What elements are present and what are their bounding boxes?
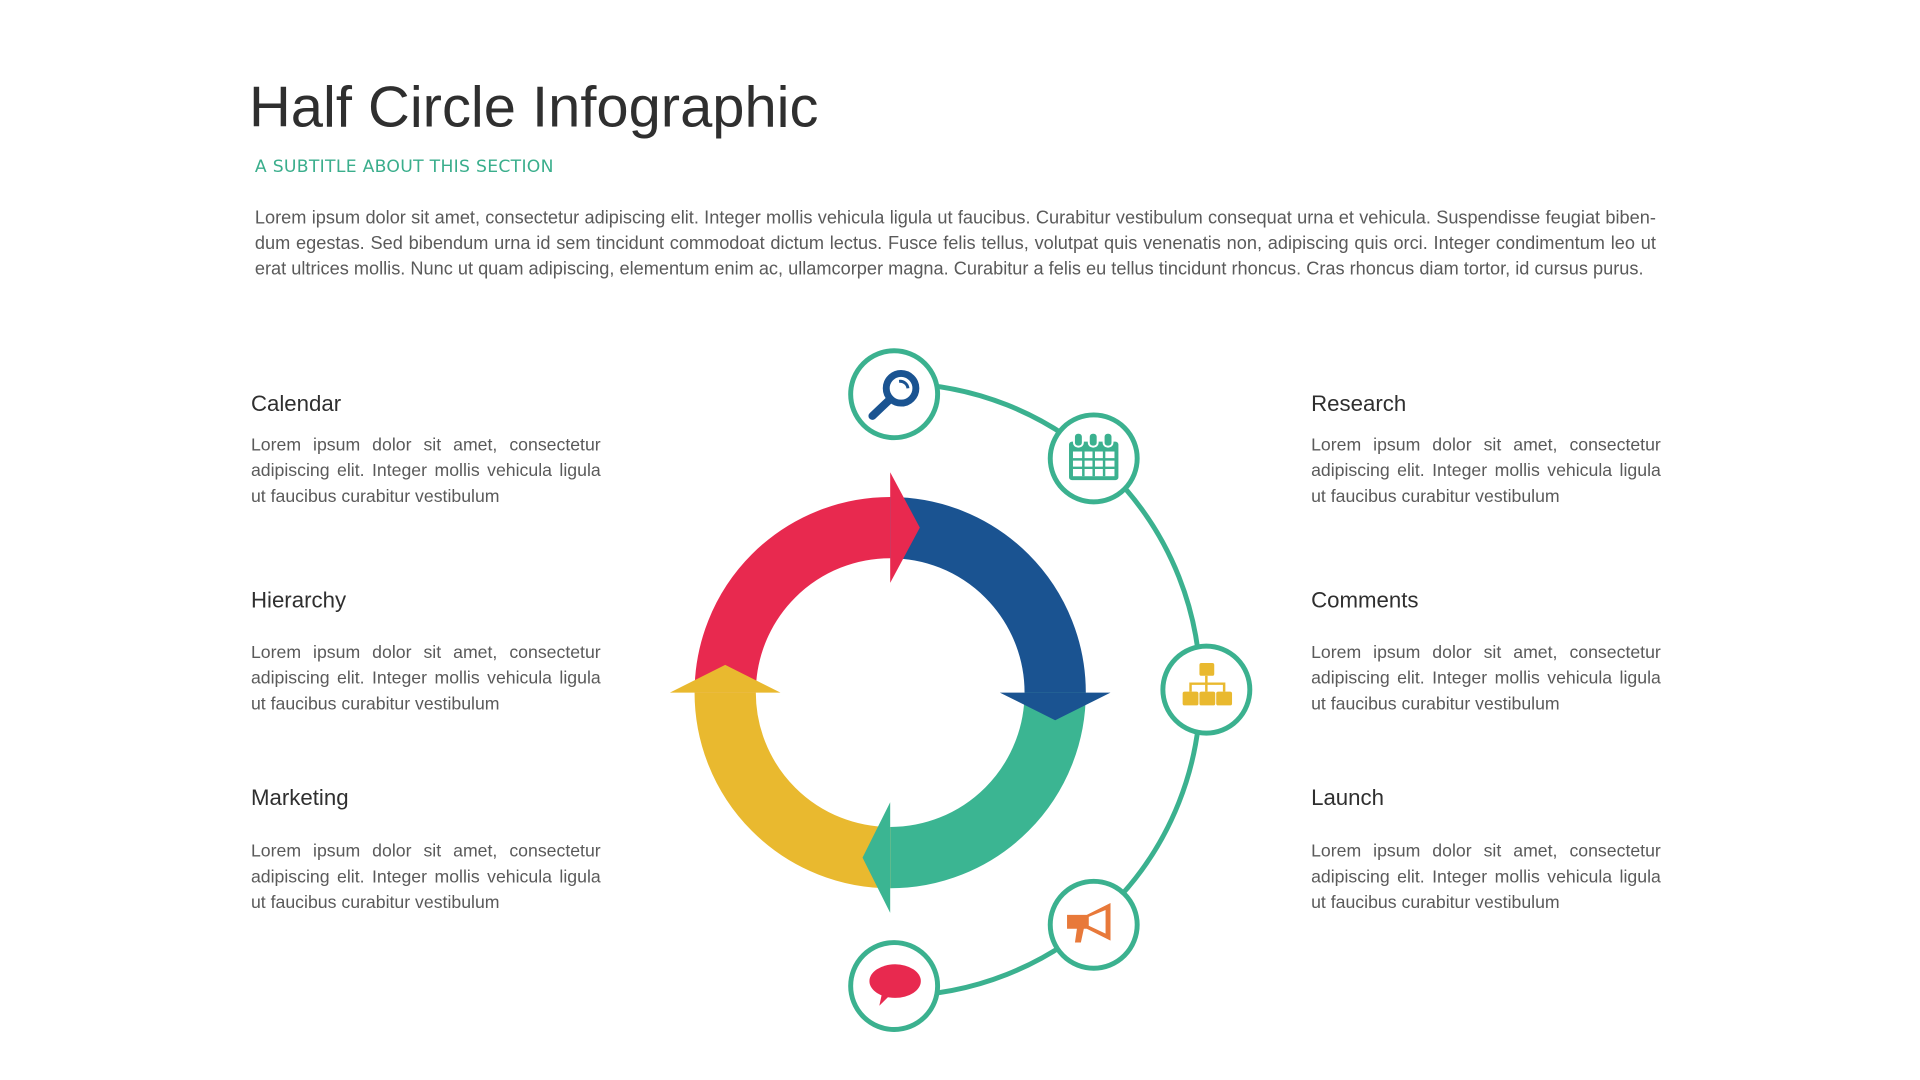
- title: Half Circle Infographic: [249, 75, 818, 139]
- text block: Launch: Lorem ipsum dolor sit amet, consectetur adipiscing elit. Integer mollis vehicula ligula ut faucibus curabitur vestibulum: [1311, 841, 1661, 912]
- text block: Calendar: Lorem ipsum dolor sit amet, consectetur adipiscing elit. Integer mollis vehicula ligula ut faucibus curabitur vestibulum: [251, 435, 601, 506]
- text block: Research: [1311, 391, 1661, 506]
- text block: Marketing: [251, 785, 601, 912]
- icon: megaphone: [1050, 881, 1137, 968]
- text block: Launch: Launch: [1311, 785, 1384, 810]
- intro paragraph: Lorem ipsum dolor sit amet, consectetur adipiscing elit. Integer mollis vehicula ligula ut faucibus. Curabitur vestibulum consequat urna et vehicula. Suspendisse feugiat biben­dum egestas. Sed bibendum urna id sem tincidunt commodoat dictum lectus. Fusce felis tellus, volutpat quis venenatis non, adipiscing quis orci. Integer condimentum leo ut erat ultrices mollis. Nunc ut quam adipiscing, elementum enim ac, ullamcorper magna. Curabitur a felis eu tellus tincidunt rhoncus. Cras rhoncus diam tortor, id cursus purus.: [255, 206, 1656, 279]
- text block: Hierarchy: [251, 588, 601, 713]
- cycle ring: [670, 472, 1111, 913]
- icon: search: [851, 351, 938, 438]
- subtitle: A SUBTITLE ABOUT THIS SECTION: [255, 157, 554, 177]
- icon: hierarchy: [1163, 646, 1250, 733]
- icon: calendar: [1050, 415, 1137, 502]
- text block: Launch: [1311, 785, 1661, 912]
- text block: Hierarchy: Hierarchy: [251, 588, 346, 613]
- text block: Research: Research: [1311, 391, 1406, 416]
- text block: Marketing: Lorem ipsum dolor sit amet, consectetur adipiscing elit. Integer mollis vehicula ligula ut faucibus curabitur vestibulum: [251, 841, 601, 912]
- connector half circle: [894, 383, 1200, 996]
- text block: Comments: Lorem ipsum dolor sit amet, consectetur adipiscing elit. Integer mollis vehicula ligula ut faucibus curabitur vestibulum: [1311, 642, 1661, 713]
- text block: Marketing: Marketing: [251, 785, 349, 810]
- text block: Calendar: [251, 391, 601, 506]
- text block: Research: Lorem ipsum dolor sit amet, consectetur adipiscing elit. Integer mollis vehicula ligula ut faucibus curabitur vestibulum: [1311, 435, 1661, 506]
- text block: Hierarchy: Lorem ipsum dolor sit amet, consectetur adipiscing elit. Integer mollis vehicula ligula ut faucibus curabitur vestibulum: [251, 642, 601, 713]
- text block: Comments: Comments: [1311, 588, 1419, 613]
- icon: speech bubble: [851, 943, 938, 1029]
- text block: Calendar: Calendar: [251, 391, 341, 416]
- text block: Comments: [1311, 588, 1661, 713]
